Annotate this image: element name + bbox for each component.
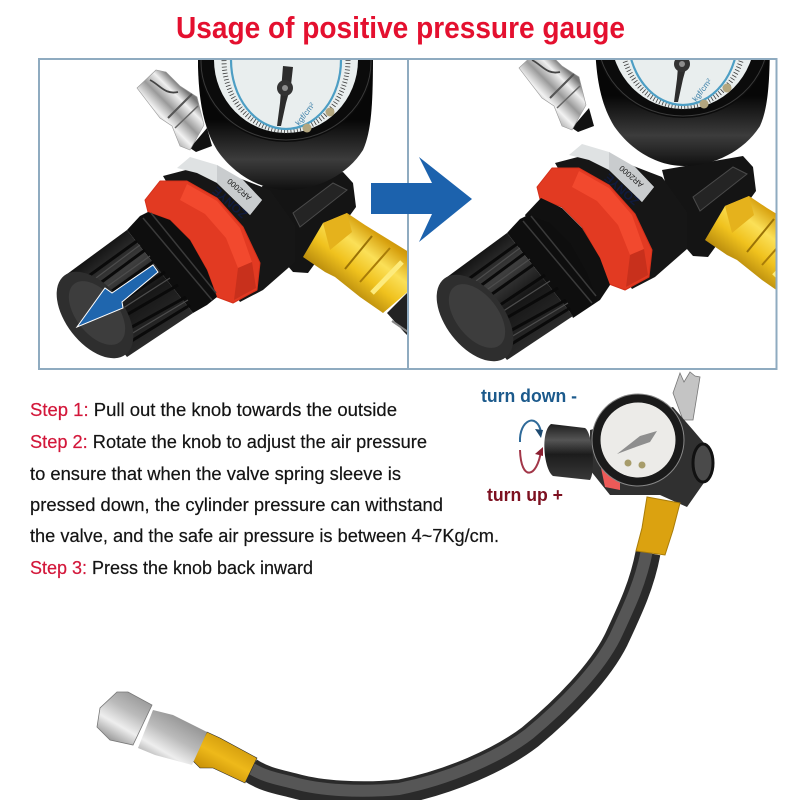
icon: turn up rotation arrow	[520, 447, 543, 473]
gauge	[596, 60, 770, 166]
icon: turn down rotation arrow	[520, 421, 543, 442]
chrome connector end	[97, 692, 152, 745]
panel frames	[39, 59, 776, 369]
small red ring	[600, 463, 620, 490]
small side cap	[693, 444, 713, 482]
small gauge face	[600, 402, 676, 478]
adjustment knob	[56, 212, 217, 358]
small regulator body	[590, 407, 710, 507]
small gold fitting	[636, 497, 680, 555]
brass fitting	[303, 213, 412, 340]
step 2 line 3: pressed down, the cylinder pressure can withstand	[30, 495, 443, 515]
step 2 line 2: to ensure that when the valve spring sleeve is	[30, 464, 401, 484]
label: turn up: turn up +	[487, 485, 563, 505]
regulator body with red ring	[537, 144, 687, 290]
small gauge rim	[592, 394, 684, 486]
gold collar	[192, 732, 257, 783]
regulator bracket	[662, 156, 756, 257]
chrome hex nut	[138, 710, 207, 765]
adjustment knob	[436, 216, 596, 362]
icon: air coupler	[137, 70, 212, 152]
threaded neck	[525, 198, 610, 318]
panel: knob pressed in (after)	[436, 60, 776, 362]
steps text block	[30, 400, 499, 578]
small knob	[544, 424, 593, 480]
regulator bracket	[262, 172, 356, 273]
title: Usage of positive pressure gauge	[176, 10, 625, 45]
step 3: Step 3: Press the knob back inward	[30, 558, 313, 578]
brass fitting	[705, 196, 776, 290]
hose	[249, 550, 648, 794]
icon: air coupler	[518, 60, 594, 132]
bottom quick-connect fitting	[97, 692, 257, 783]
arrow: pull knob outward	[77, 265, 158, 327]
regulator body with red ring	[145, 157, 295, 303]
panel: knob pulled out (before)	[56, 60, 407, 358]
small air coupler	[673, 372, 700, 420]
label: turn down: turn down -	[481, 386, 577, 406]
step 1: Step 1: Pull out the knob towards the outside	[30, 400, 397, 420]
step 2 line 4: the valve, and the safe air pressure is between 4~7Kg/cm.	[30, 526, 499, 546]
arrow: from before to after	[371, 157, 472, 242]
small gauge needle	[617, 431, 657, 454]
gauge	[198, 60, 373, 186]
small gauge screws	[624, 460, 646, 468]
step 2: Step 2: Rotate the knob to adjust the air pressure	[30, 432, 427, 452]
small regulator assembly	[544, 372, 713, 555]
